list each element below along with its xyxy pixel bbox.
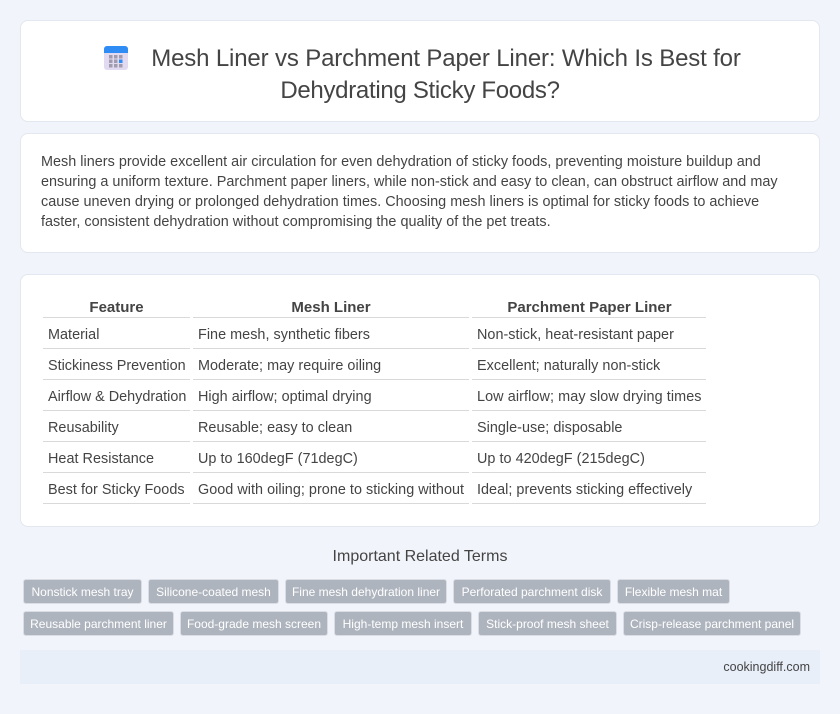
row: material: Fine mesh, synthetic fibers <box>198 327 370 343</box>
text block: summary paragraph: cause uneven drying or prolonged dehydration times. Choosing mesh liners is optimal for sticky foods to achieve <box>41 194 759 210</box>
panel: title card <box>20 20 820 122</box>
row: airflow: Airflow & Dehydration <box>48 389 186 405</box>
row: best for sticky foods: Best for Sticky Foods <box>48 482 185 498</box>
related term tags: Stick-proof mesh sheet <box>486 617 609 631</box>
related term tags: Crisp-release parchment panel <box>630 617 794 631</box>
row: heat resistance <box>48 451 645 467</box>
row: airflow: High airflow; optimal drying <box>198 389 372 405</box>
row: reusability <box>48 420 622 436</box>
row: best for sticky foods <box>48 482 692 498</box>
header row <box>89 299 672 316</box>
title: Mesh Liner vs Parchment Paper Liner: Which Is Best for <box>151 45 741 72</box>
row: reusability: Reusable; easy to clean <box>198 420 352 436</box>
related term tags: Fine mesh dehydration liner <box>292 585 440 599</box>
row: stickiness prevention: Excellent; naturally non-stick <box>477 358 660 374</box>
row: best for sticky foods: Good with oiling; prone to sticking without <box>198 482 464 498</box>
heading: related terms: Important Related Terms <box>333 548 507 565</box>
row: airflow <box>48 389 702 405</box>
footer bar <box>20 650 820 684</box>
footer source text: cookingdiff.com <box>723 660 810 674</box>
header row: Feature <box>89 299 144 316</box>
related term tags: Perforated parchment disk <box>462 585 602 599</box>
related term tags: High-temp mesh insert <box>343 617 463 631</box>
related term tags <box>23 579 801 636</box>
row: heat resistance: Up to 420degF (215degC) <box>477 451 645 467</box>
comparison table <box>43 299 706 504</box>
row: best for sticky foods: Ideal; prevents sticking effectively <box>477 482 692 498</box>
header row: Mesh Liner <box>291 299 371 316</box>
row: material: Non-stick, heat-resistant paper <box>477 327 674 343</box>
related term tags: Silicone-coated mesh <box>156 585 271 599</box>
row: stickiness prevention: Stickiness Prevention <box>48 358 186 374</box>
related term tags: Food-grade mesh screen <box>187 617 321 631</box>
row: reusability: Single-use; disposable <box>477 420 622 436</box>
panel: summary card <box>20 133 820 253</box>
icon: calendar grid <box>104 46 128 70</box>
title <box>151 45 741 104</box>
row: reusability: Reusability <box>48 420 119 436</box>
row: material: Material <box>48 327 99 343</box>
related term tags: Flexible mesh mat <box>625 585 722 599</box>
text block: summary paragraph: faster, consistent dehydration without compromising the quality of the pet treats. <box>41 214 551 230</box>
header row: Parchment Paper Liner <box>507 299 672 316</box>
row: heat resistance: Heat Resistance <box>48 451 154 467</box>
text block: summary paragraph: ensuring a uniform texture. Parchment paper liners, while non-stick and easy to clean, can obstruct airflow and may <box>41 174 778 190</box>
related term tags: Nonstick mesh tray <box>31 585 134 599</box>
text block: summary paragraph: Mesh liners provide excellent air circulation for even dehydration of sticky foods, preventing moisture buildup and <box>41 154 761 170</box>
row: airflow: Low airflow; may slow drying times <box>477 389 702 405</box>
text block: summary paragraph <box>41 154 778 230</box>
row: material <box>48 327 674 343</box>
title: Dehydrating Sticky Foods? <box>280 77 560 104</box>
related term tags: Reusable parchment liner <box>30 617 167 631</box>
row: heat resistance: Up to 160degF (71degC) <box>198 451 358 467</box>
panel: comparison table card <box>20 274 820 527</box>
row: stickiness prevention <box>48 358 660 374</box>
row: stickiness prevention: Moderate; may require oiling <box>198 358 381 374</box>
